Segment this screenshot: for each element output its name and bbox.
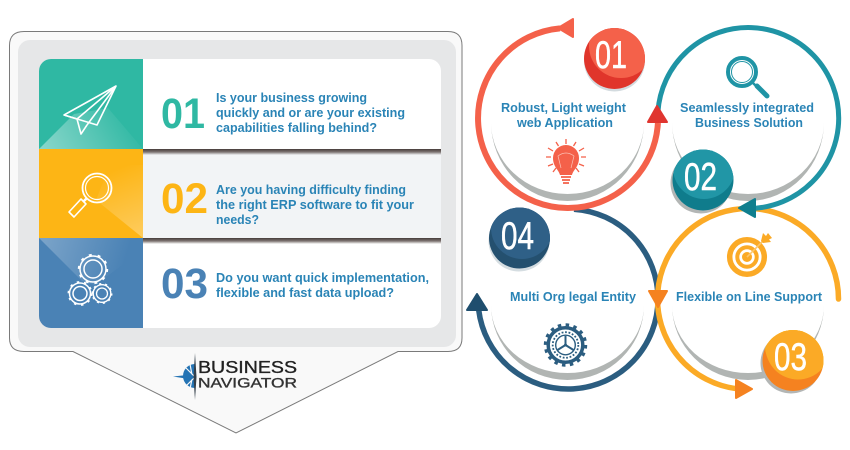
row 1 question: capabilities falling behind? <box>216 121 377 135</box>
badge 03: 03 <box>774 336 807 379</box>
badge 04 <box>488 208 550 272</box>
row 2 question: the right ERP software to fit your <box>216 198 414 212</box>
badge 03 <box>760 330 824 394</box>
row 3 question <box>216 271 429 300</box>
icon: light bulb <box>546 139 586 183</box>
step 2 label <box>680 101 814 130</box>
icon: gear wheel <box>545 325 586 365</box>
badge 01 <box>584 28 645 92</box>
arc: step 1 arrow <box>478 19 667 208</box>
row 3 question: Do you want quick implementation, <box>216 271 429 285</box>
badge 02 <box>670 150 734 214</box>
logo wordmark <box>198 357 297 390</box>
icon: paper plane <box>64 86 116 134</box>
question card <box>39 59 441 328</box>
row 2 question: needs? <box>216 213 259 227</box>
cycle: crescents <box>491 122 824 380</box>
row 1 question: quickly and or are your existing <box>216 106 405 120</box>
step 1 label: web Application <box>516 116 613 130</box>
icon: teal magnifier <box>728 58 767 96</box>
logo: Business Navigator <box>173 353 297 400</box>
step 1 label: Robust, Light weight <box>501 101 627 115</box>
row 2 question <box>216 183 414 227</box>
arc: step 4 arrow <box>467 209 658 389</box>
panel inner grey <box>18 40 456 347</box>
icon: target <box>730 233 772 274</box>
step 4 label: Multi Org legal Entity <box>510 290 636 304</box>
logo wordmark: BUSINESS <box>198 357 297 377</box>
row 1 question: Is your business growing <box>216 91 367 105</box>
step 1 label <box>501 101 627 130</box>
logo wordmark: NAVIGATOR <box>198 374 297 390</box>
row 2 number: 02 <box>161 175 208 223</box>
step 2 label: Business Solution <box>695 116 803 130</box>
icon: magnifier <box>69 174 112 217</box>
arc: step 2 arrow <box>658 28 839 217</box>
icon: gears <box>68 255 112 305</box>
arc: step 3 arrow <box>649 208 838 398</box>
panel: questions <box>10 32 462 433</box>
row 1 question <box>216 91 405 135</box>
row 3 question: flexible and fast data upload? <box>216 286 394 300</box>
badge 04: 04 <box>501 215 534 258</box>
step 2 label: Seamlessly integrated <box>680 101 814 115</box>
icon: compass <box>173 353 196 400</box>
badge 01: 01 <box>595 34 627 77</box>
row 3 number: 03 <box>161 260 208 308</box>
row 2 question: Are you having difficulty finding <box>216 183 406 197</box>
badge 02: 02 <box>684 156 717 199</box>
row 1 number: 01 <box>161 90 205 138</box>
step 3 label: Flexible on Line Support <box>676 290 823 304</box>
panel outer frame with pointer <box>10 32 462 433</box>
